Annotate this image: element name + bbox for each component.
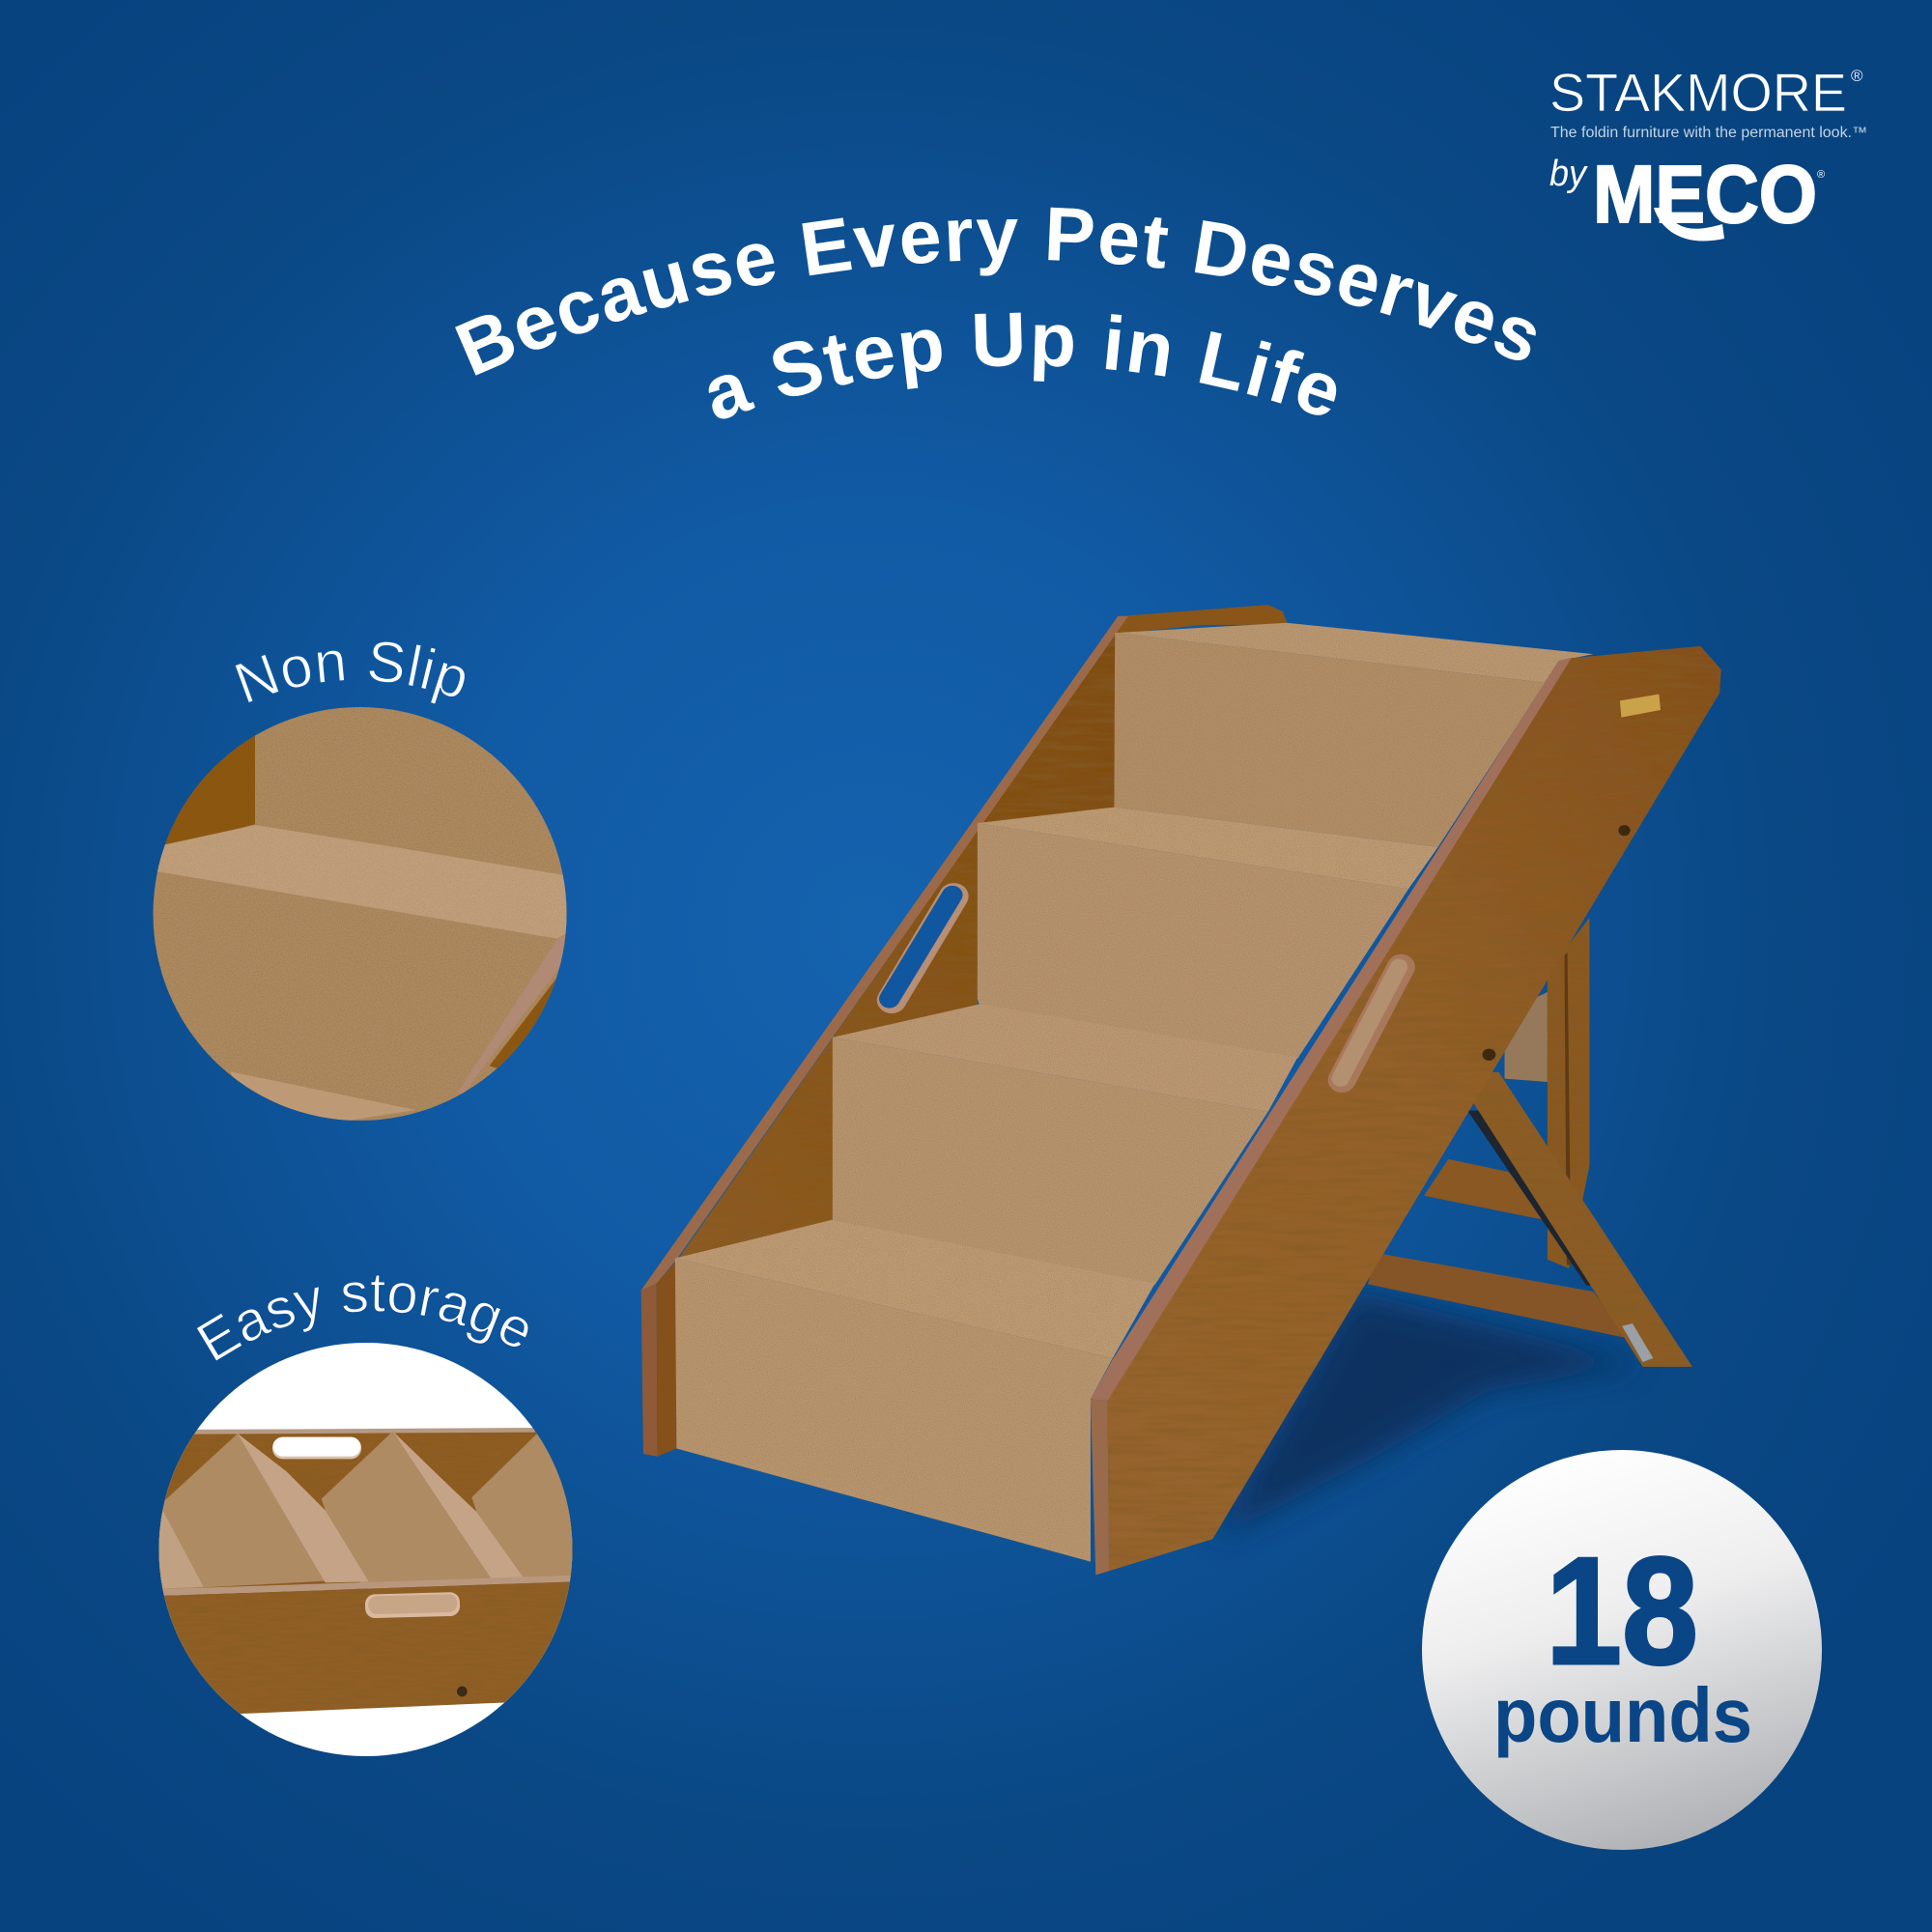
lower crossbar [1368,1253,1631,1339]
right side panel [1108,646,1721,1571]
top step riser [1114,633,1546,847]
step 4 riser [675,1259,1113,1562]
badge circle [1422,1450,1822,1850]
step 3 tread [833,1004,1297,1112]
title line 2: a Step Up in Life [709,313,1337,419]
title line 1: Because Every Pet Deserves [455,207,1536,376]
rear leg carpet [1505,992,1548,1082]
upper crossbar [1424,1159,1552,1222]
left side panel [676,618,1125,1262]
logo: Stakmore by Meco [1549,62,1867,242]
easy storage label: Easy storage [196,1275,527,1362]
logo Meco: MECO [1593,149,1817,240]
easy storage photo circle [158,1343,572,1756]
weight unit: pounds [1493,1672,1752,1758]
callout: non slip [153,641,566,1121]
left panel front edge [641,1284,657,1457]
screw upper [1618,825,1631,836]
step 4 tread [675,1220,1155,1358]
rear leg post [1548,918,1590,1268]
right panel front edge [1091,1400,1109,1575]
weight number: 18 [1546,1526,1698,1696]
product: pet stairs [641,605,1721,1575]
logo tagline: The foldin furniture with the permanent look.™ [1550,125,1867,141]
brand plaque [1620,694,1661,718]
left panel front face [657,1261,676,1457]
floor shadow [1212,1290,1642,1541]
registered mark: ® [1851,67,1863,85]
folding legs [1368,918,1692,1367]
logo wordmark: STAKMORE [1549,62,1847,123]
right panel handle recess [1341,967,1401,1080]
non slip photo circle [153,707,566,1121]
title: curved headline [455,207,1536,419]
non slip label: Non Slip [234,641,465,703]
step 2 tread [978,808,1438,889]
weight badge [1422,1450,1822,1850]
right panel top edge [1091,658,1572,1401]
diagonal leg [1454,1072,1692,1367]
callout: easy storage [158,1275,572,1756]
logo by: by [1549,154,1588,194]
metal hinge [1622,1323,1653,1362]
step 2 riser [978,823,1408,1059]
step 3 riser [833,1037,1268,1285]
metal strut [1467,1111,1597,1286]
left panel top edge [641,616,1128,1291]
carpet steps [675,623,1593,1562]
top step tread [1115,623,1593,683]
logo Meco: ® [1817,169,1825,181]
top back edge [1117,605,1288,634]
screw lower [1483,1049,1495,1061]
left panel handle cut-out [890,895,953,1000]
